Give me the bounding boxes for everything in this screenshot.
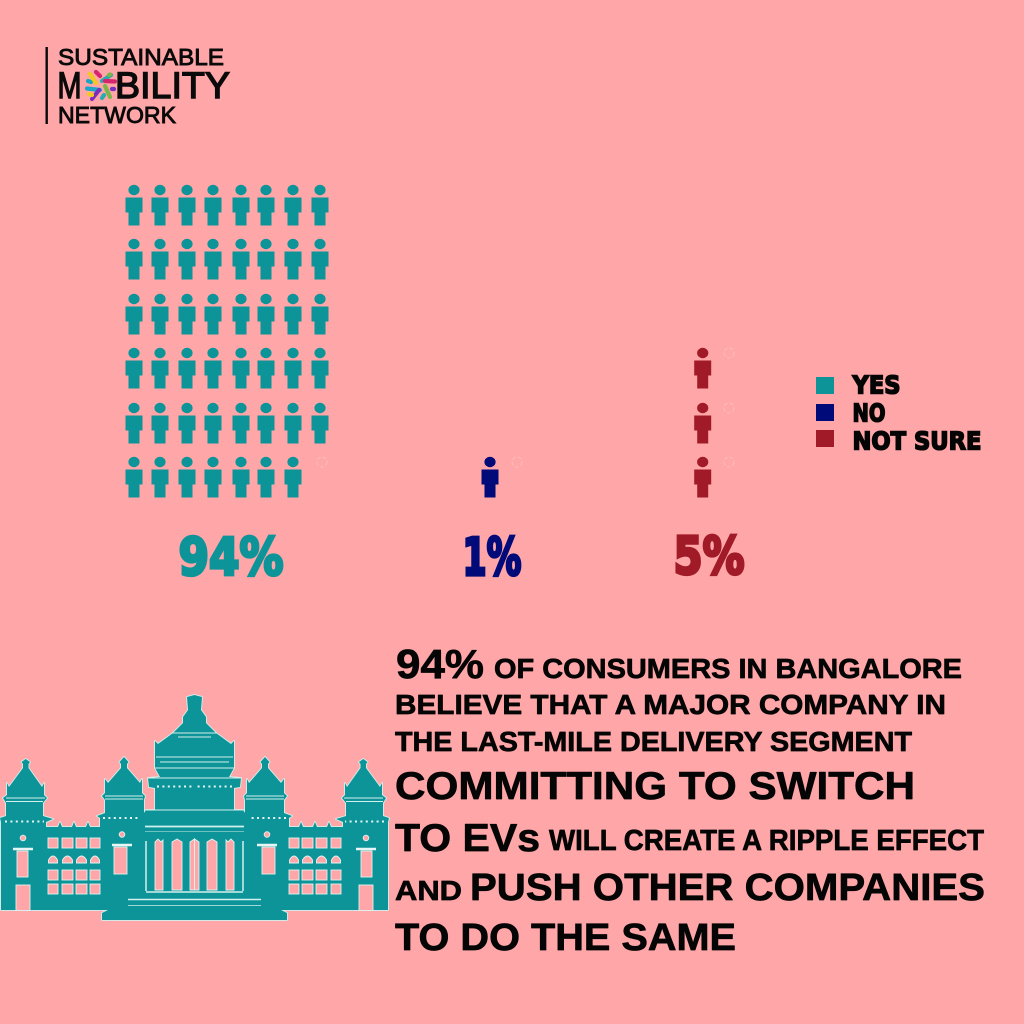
statement text: OF CONSUMERS IN BANGALORE	[494, 653, 962, 684]
logo: Sustainable Mobility Network: BILITY	[115, 65, 230, 106]
logo: Sustainable Mobility Network	[46, 44, 230, 128]
statement text: TO EVs	[395, 817, 540, 860]
illustration: Vidhana Soudha building	[0, 695, 389, 920]
logo: Sustainable Mobility Network: NETWORK	[58, 102, 176, 128]
pictogram: yes, 94 percent	[126, 185, 328, 498]
figure: 5%: 5%	[674, 527, 744, 587]
logo: Sustainable Mobility Network: SUSTAINABLE	[58, 44, 224, 70]
statement text: TO DO THE SAME	[395, 917, 736, 959]
statement text: AND	[395, 875, 462, 906]
pictogram: not sure, 5 percent	[694, 348, 734, 498]
statement text: WILL CREATE A RIPPLE EFFECT	[549, 825, 984, 857]
legend: NO	[852, 398, 886, 428]
statement text	[395, 641, 985, 959]
legend: YES	[852, 370, 900, 400]
statement text: COMMITTING TO SWITCH	[395, 765, 915, 808]
pictogram: no, 1 percent	[482, 457, 522, 498]
figure: 94%: 94%	[178, 528, 284, 588]
statement text: 94%	[396, 641, 484, 687]
figure: 1%: 1%	[462, 528, 522, 588]
statement text: BELIEVE THAT A MAJOR COMPANY IN	[395, 689, 946, 720]
statement text: THE LAST-MILE DELIVERY SEGMENT	[395, 726, 912, 757]
statement text: PUSH OTHER COMPANIES	[470, 867, 985, 909]
legend: NOT SURE	[852, 426, 982, 456]
icon: colourful pinwheel logo mark	[87, 72, 115, 99]
logo: Sustainable Mobility Network: M	[58, 65, 82, 106]
legend	[816, 370, 982, 456]
